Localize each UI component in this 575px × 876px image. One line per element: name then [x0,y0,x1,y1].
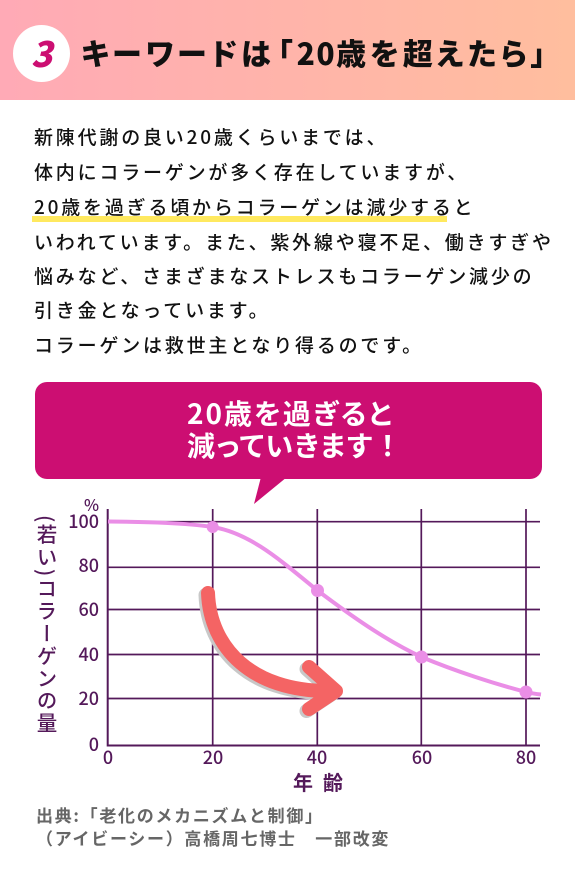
body text block: 20歳を過ぎる頃からコラーゲンは減少すると [34,193,475,220]
y axis labels: % [84,492,99,516]
x axis labels: 60 [412,744,432,770]
x axis labels: 20 [203,744,223,770]
body text block: 引き金となっています。 [34,296,270,323]
number badge: 3 [31,27,52,78]
highlight underline [32,216,447,222]
y axis labels: 80 [78,552,99,578]
x axis labels: 80 [516,744,536,770]
callout: 減っていきます！ [187,425,403,465]
y axis labels [68,492,99,757]
y axis labels: 100 [68,508,99,534]
body text block: 新陳代謝の良い20歳くらいまでは、 [34,123,388,150]
body text block: いわれています。また、紫外線や寝不足、働きすぎや [34,228,554,255]
x axis title: 齢 [323,767,343,796]
callout [35,382,542,504]
number badge [13,25,70,82]
trend arrow [208,593,336,709]
body text block: 悩みなど、さまざまなストレスもコラーゲン減少の [34,262,534,289]
body text block: 体内にコラーゲンが多く存在していますが、 [34,158,469,185]
y axis labels: 0 [89,731,99,757]
x axis title: 年 [293,767,313,796]
title: キーワードは「20歳を超えたら」 [81,30,550,74]
source note: （アイビーシー）高橋周七博士 一部改変 [36,825,390,850]
y axis labels: 40 [78,641,99,667]
source note: 出典:「老化のメカニズムと制御」 [36,802,324,827]
x axis labels [103,744,536,770]
y axis labels: 60 [78,596,99,622]
y axis title: (若い)コラーゲンの量 [32,515,62,735]
arrow shadow [206,595,334,711]
y axis labels: 20 [78,685,99,711]
grid lines [108,509,540,746]
source note [36,802,390,850]
x axis title [293,767,343,796]
body text block [32,123,554,358]
header band [0,0,575,100]
collagen curve [108,521,541,698]
x axis labels: 40 [307,744,327,770]
chart [68,492,542,796]
body text block: コラーゲンは救世主となり得るのです。 [34,331,424,358]
x axis labels: 0 [103,744,113,770]
callout: 20歳を過ぎると [187,393,394,433]
